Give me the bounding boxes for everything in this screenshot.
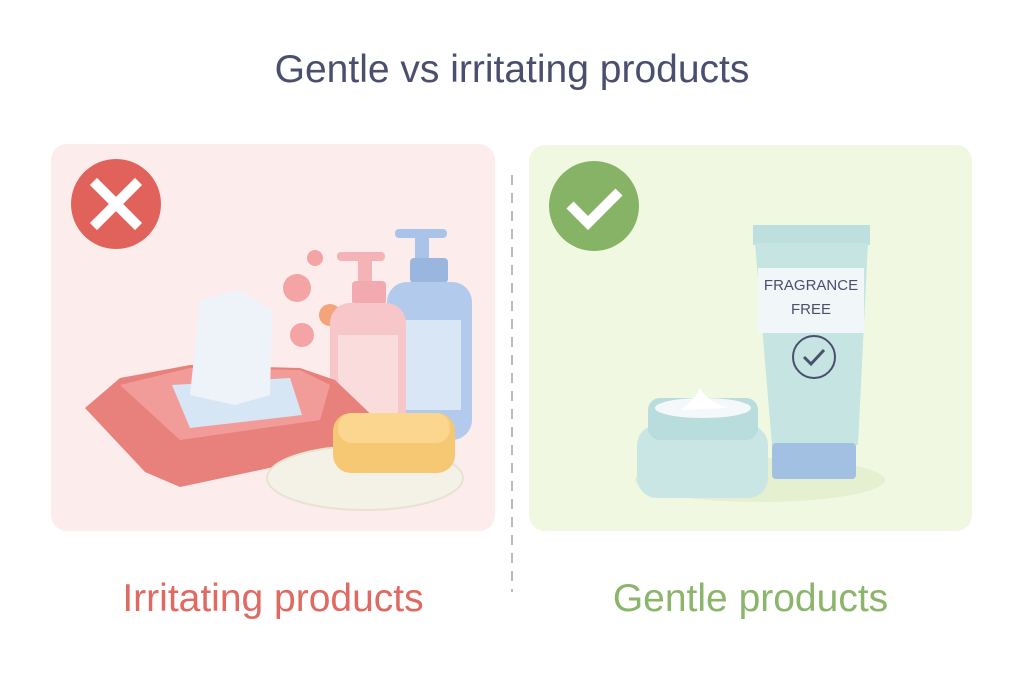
icon: cross (71, 159, 161, 249)
tube: FREE (791, 301, 831, 318)
tube: FRAGRANCE (764, 277, 858, 294)
pink bottle (330, 252, 406, 443)
icon: check (549, 161, 639, 251)
jar (637, 388, 768, 498)
panel: irritating (51, 144, 495, 531)
label: gentle: Gentle products (613, 577, 888, 620)
divider (511, 175, 513, 592)
flowers (283, 250, 341, 347)
blue bottle (387, 229, 472, 440)
title: Gentle vs irritating products (275, 48, 749, 91)
panel: gentle (529, 145, 972, 531)
tube (753, 225, 870, 479)
soap dish (267, 413, 463, 510)
wipes pack (85, 290, 382, 487)
label: irritating: Irritating products (122, 577, 424, 620)
